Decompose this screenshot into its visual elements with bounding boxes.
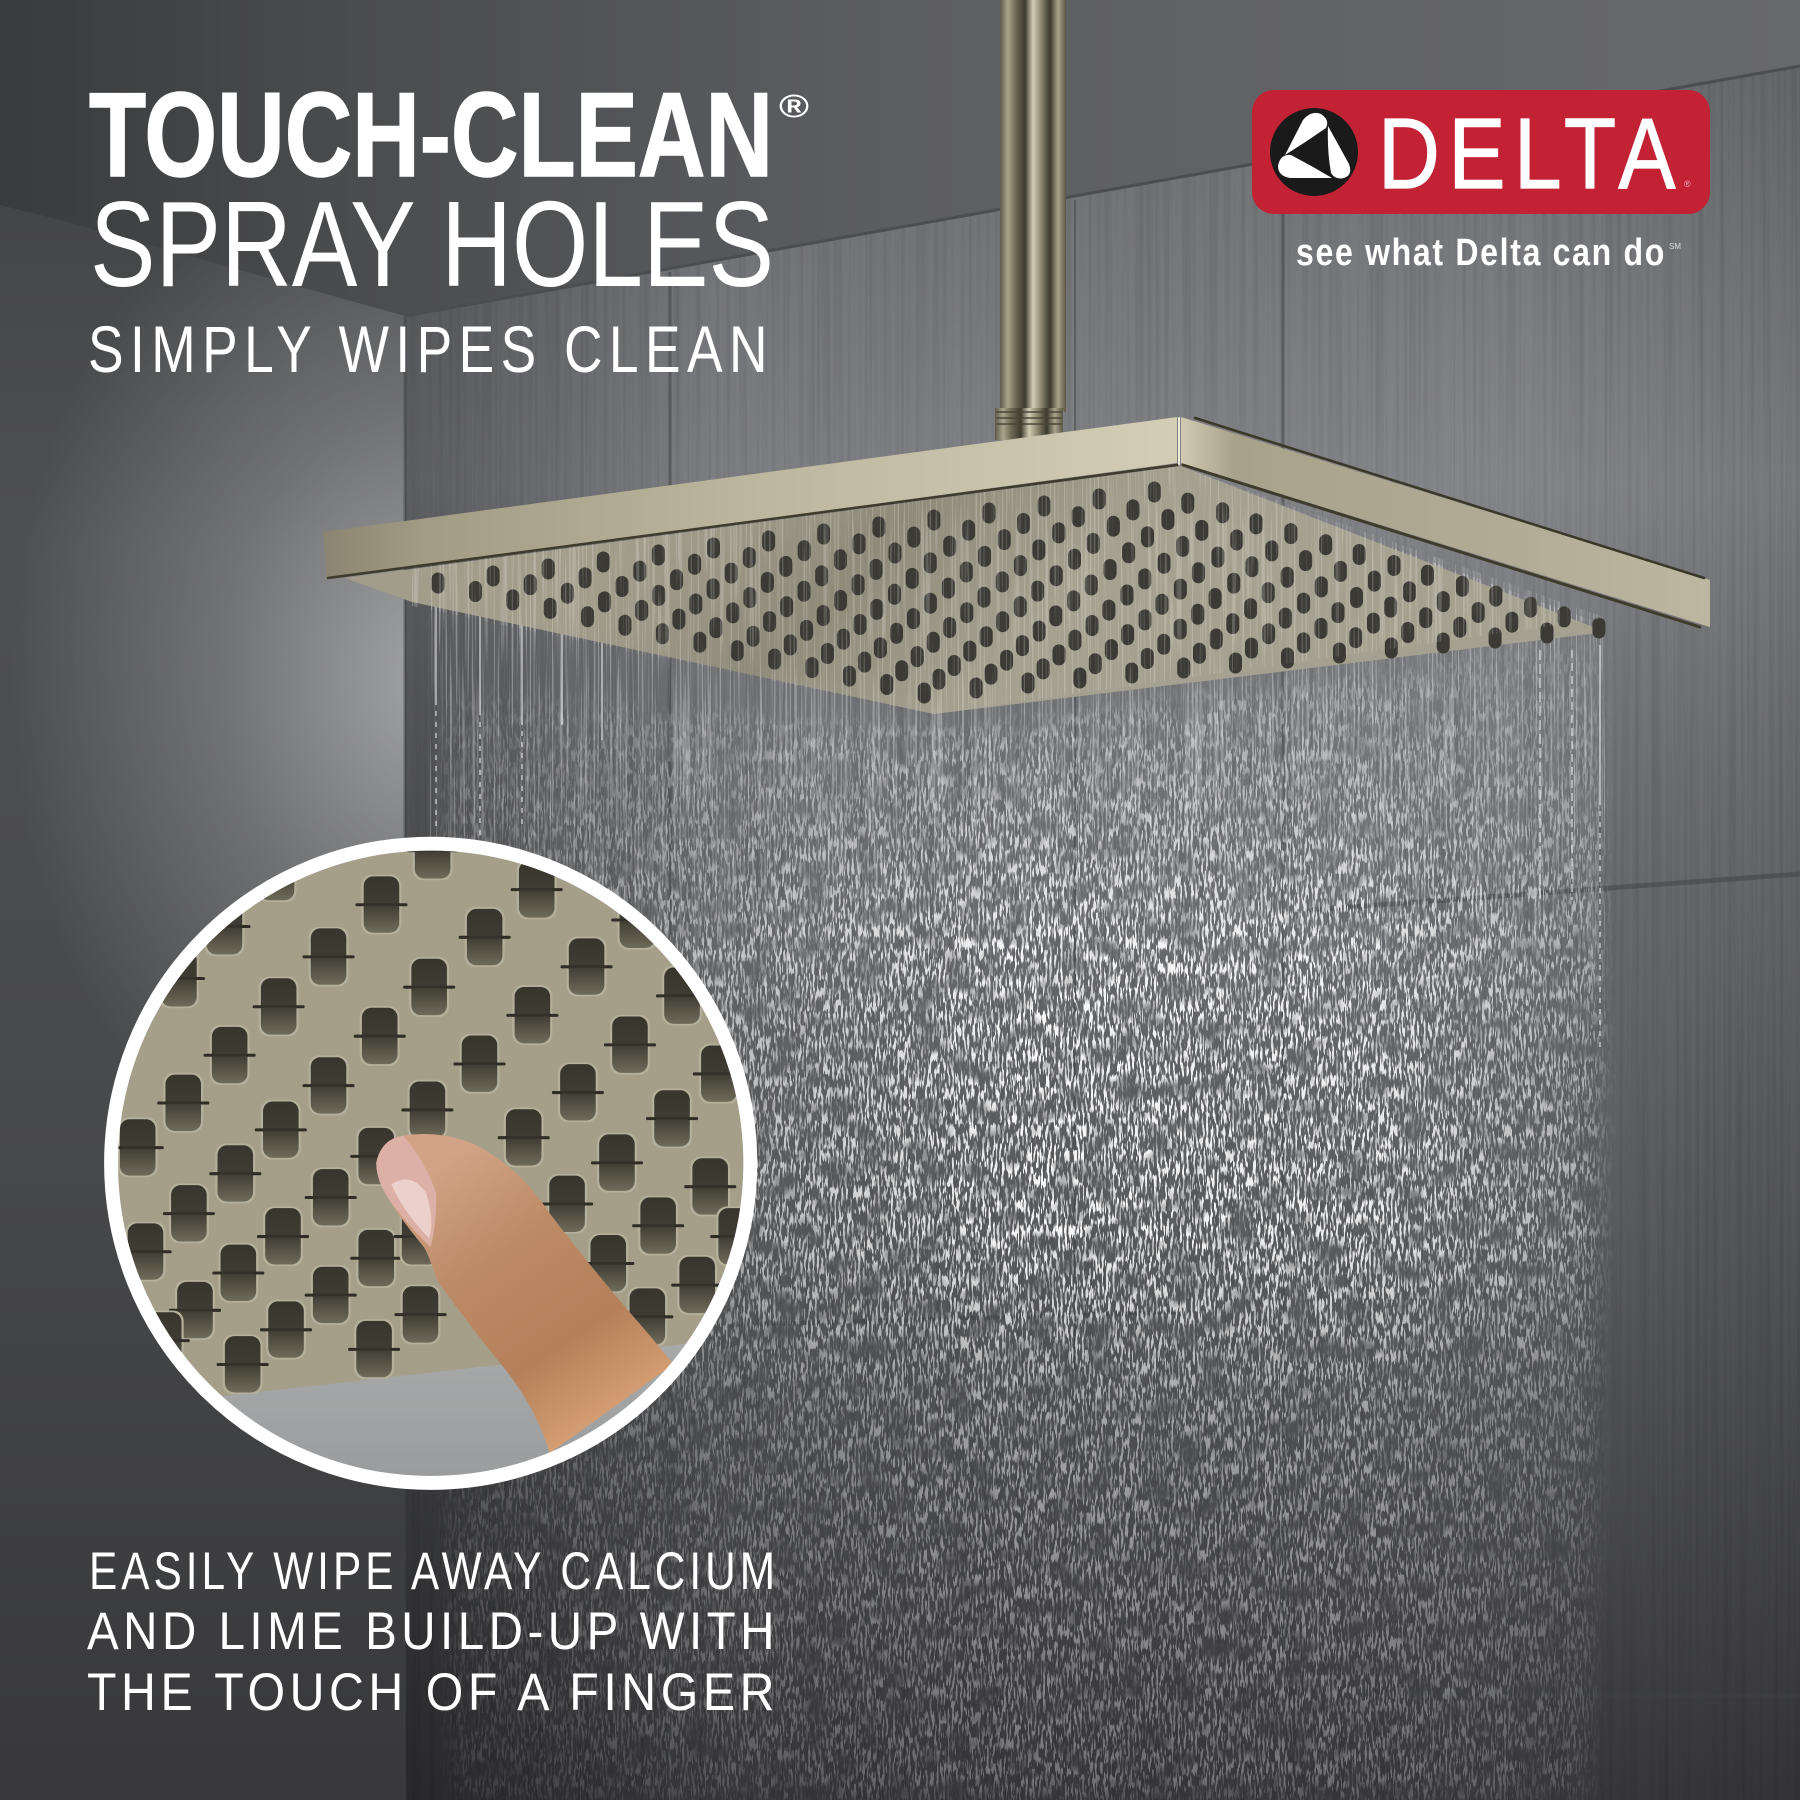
fingernail — [376, 1136, 436, 1247]
white ring — [111, 844, 750, 1483]
logo wordmark: DELTA — [1378, 98, 1684, 210]
shower head right face — [1181, 417, 1710, 627]
title: TOUCH-CLEAN: TOUCH-CLEAN — [89, 68, 773, 202]
line 1: EASILY WIPE AWAY CALCIUM — [89, 1542, 779, 1601]
shower head underside with spray holes — [346, 466, 1606, 714]
finger — [376, 1134, 673, 1453]
subtitle: SIMPLY WIPES CLEAN: SIMPLY WIPES CLEAN — [88, 312, 774, 386]
inset circle: finger wiping spray holes — [111, 820, 762, 1514]
service mark: SM — [1669, 242, 1681, 251]
title block — [88, 68, 810, 386]
magnified spray holes — [112, 820, 762, 1394]
water spray — [430, 532, 1611, 1800]
registered mark: ® — [779, 88, 810, 124]
logo red badge — [1252, 90, 1710, 214]
bottom description text — [87, 1542, 779, 1722]
tagline: see what Delta can do — [1296, 232, 1666, 274]
line 3: THE TOUCH OF A FINGER — [87, 1663, 779, 1722]
title: SPRAY HOLES: SPRAY HOLES — [90, 176, 774, 312]
Delta logo — [1252, 90, 1710, 274]
shower head left face — [323, 417, 1177, 578]
shower head — [323, 416, 1710, 714]
logo registered mark: ® — [1684, 179, 1691, 189]
line 2: AND LIME BUILD-UP WITH — [87, 1602, 779, 1661]
shower arm pipe — [995, 0, 1066, 440]
icon: Delta triangle emblem — [1270, 108, 1358, 196]
area below spray plate — [222, 1344, 686, 1476]
